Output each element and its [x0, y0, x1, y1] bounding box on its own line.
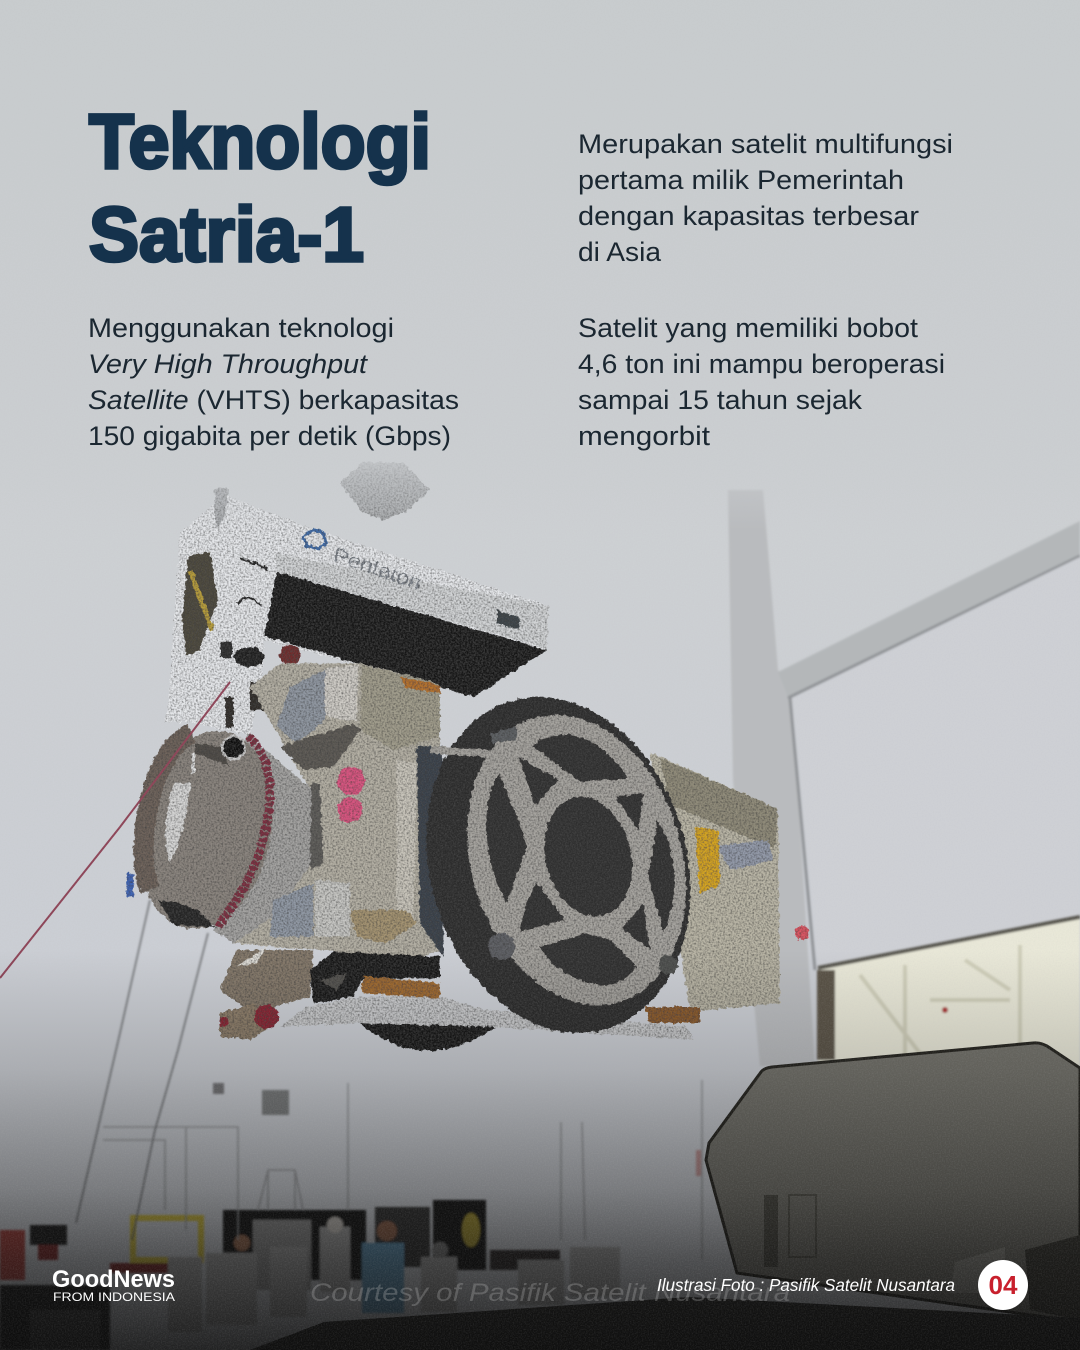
- photo caption: Ilustrasi Foto : Pasifik Satelit Nusantara: [657, 1275, 955, 1295]
- background: wall fixtures and cables: [76, 900, 702, 1260]
- satellite: rear body behind disc: [645, 752, 809, 1023]
- text block: multifunction satellite: dengan kapasitas terbesar: [578, 201, 919, 231]
- background: floor: [250, 1297, 1080, 1350]
- watermark: Courtesy of Pasifik Satelit Nusantara: [310, 1279, 790, 1307]
- satellite: large black disc with ring: [388, 666, 729, 1064]
- overlay: dark fade at bottom: [0, 950, 1080, 1350]
- text block: multifunction satellite: di Asia: [578, 237, 661, 267]
- page number badge: 04: [989, 1270, 1018, 1300]
- title: [89, 99, 431, 278]
- satellite: lower left body: [122, 663, 693, 1040]
- text block: technology: 150 gigabita per detik (Gbps): [88, 421, 451, 451]
- satellite: upper white module: Pentaton: [330, 544, 425, 595]
- body: brown insulation: [220, 950, 313, 1013]
- text block: weight and lifetime: sampai 15 tahun sejak: [578, 385, 863, 415]
- text block: technology: Menggunakan teknologi: [88, 313, 394, 343]
- disc: dark cells between ring struts: [486, 735, 675, 985]
- background: hangar pillar and beam: [728, 490, 1080, 1066]
- text block: weight and lifetime: 4,6 ton ini mampu beroperasi: [578, 349, 945, 379]
- text block: weight and lifetime: Satelit yang memiliki bobot: [578, 313, 919, 343]
- page number badge: [978, 1260, 1028, 1310]
- background: large transport container: [706, 1043, 1080, 1322]
- text block: multifunction satellite: pertama milik Pemerintah: [578, 165, 904, 195]
- text block: weight and lifetime: [578, 313, 945, 451]
- text block: technology: [88, 313, 459, 451]
- background: hangar window: [817, 917, 1080, 1066]
- red support cable: [0, 682, 230, 978]
- satellite: [122, 462, 809, 1064]
- body: cylinder sleeve: [213, 733, 317, 943]
- logo: GoodNews from Indonesia: FROM INDONESIA: [53, 1292, 175, 1304]
- title: Satria-1: [89, 192, 364, 278]
- text block: weight and lifetime: mengorbit: [578, 421, 711, 451]
- body: engine cylinder: [122, 719, 290, 941]
- body: magenta tags: [337, 767, 365, 795]
- satellite: top reflector: [340, 462, 430, 520]
- body: blue mark on wall: [127, 873, 133, 897]
- text block: multifunction satellite: Merupakan satelit multifungsi: [578, 129, 953, 159]
- logo: GoodNews from Indonesia: GoodNews: [52, 1266, 175, 1293]
- background: people and equipment at the floor: [0, 1200, 620, 1350]
- body: main plate: [233, 663, 440, 960]
- body: foil panels: [270, 883, 313, 937]
- title: Teknologi: [89, 99, 431, 185]
- body: dark cavity and orange strip: [310, 952, 440, 1003]
- body: platform: [280, 997, 693, 1040]
- satellite: upper white module: [165, 487, 549, 735]
- text block: technology: Satellite (VHTS) berkapasitas: [88, 385, 459, 415]
- body: top block: [277, 670, 325, 743]
- text block: technology: Very High Throughput: [88, 349, 369, 379]
- satellite: bottom antenna shadow: [356, 1020, 496, 1051]
- text block: multifunction satellite: [578, 129, 953, 267]
- overlay: light haze at top: [0, 0, 1080, 530]
